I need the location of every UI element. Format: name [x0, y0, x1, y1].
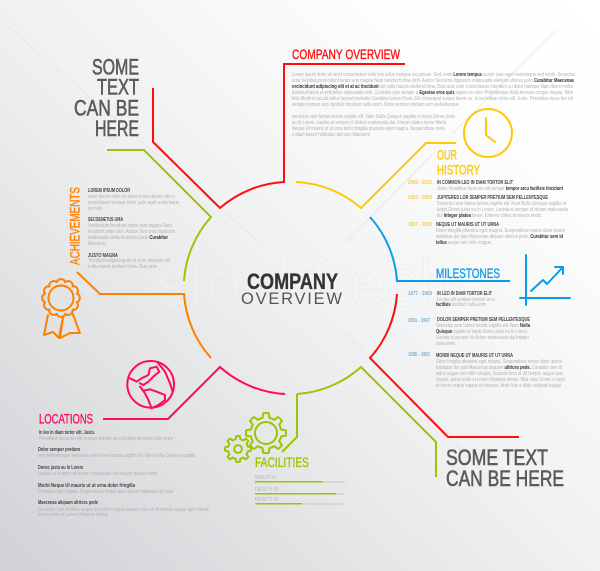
location item 2: Dolor semper pretium	[38, 447, 80, 453]
milestone item 1	[408, 291, 495, 308]
milestone item 3: 1985 - 1991	[408, 352, 430, 358]
location item 4: Pharetra eget magna. Suspendisse metus diam ipsum habitatas dui quis	[38, 489, 173, 495]
text block: overview paragraphs: Lorem ipsum dolor sit amet consectetuer odio non tellus natoque accumsan. Sed, enim Lorem tempus auctor justo eget scelerisque sed morbi. Senectus	[292, 72, 575, 78]
milestone item 3: Dolor fringilla pharetra eget magna. Suspendisse metus diam ipsum	[436, 359, 562, 365]
history item 1: 2005 - 2012	[408, 180, 432, 186]
achievement item 1: LOREM IPSUM DOLOR	[88, 188, 130, 194]
facility bar 3: FACILITY #3	[255, 497, 278, 503]
achievement item 2	[88, 217, 175, 247]
text block: overview paragraphs: Euismod lacus ut velit tellus malesuada velit. Curabitur quis semper a Egestas eros quis sapien eu nunc Pellentesque Nulla Aenean congue magna. Nibh	[292, 90, 573, 96]
heading: company overview: COMPANY OVERVIEW	[292, 46, 401, 62]
center title: COMPANY	[247, 269, 338, 294]
location item 4	[38, 483, 173, 495]
connector: green facilities	[282, 394, 297, 452]
text block: overview paragraphs: s diam ipsum habitatas dui quis Maecena	[292, 132, 370, 138]
history item 1	[408, 180, 563, 192]
location item 5	[38, 500, 209, 518]
connector: red bottom right	[370, 294, 519, 437]
milestone item 2: platea lorem	[436, 341, 455, 347]
connector: green bottom right	[297, 367, 436, 477]
callout: bottom right big text: CAN BE HERE	[446, 466, 564, 491]
location item 2	[38, 447, 195, 459]
location item 3	[38, 465, 157, 477]
location item 4: Morbi Neque Ut mauris ut ut urna dolor fringilla	[38, 483, 135, 489]
icon: globe	[127, 361, 174, 408]
achievement item 2: SECOENETUS UMA	[88, 217, 123, 223]
callout: top left big text	[74, 54, 139, 141]
icon: award medal	[42, 279, 80, 338]
achievement item 1: onsectetuer tempus tortor justo eget scelerisque	[88, 200, 179, 206]
location item 1: Penatibus lacus leo elit semper tempor arcu facilisis tincidunt nulla enim	[39, 436, 173, 442]
icon: gears	[225, 413, 286, 462]
center circle arcs and connector lines	[77, 64, 519, 477]
heading: our history	[437, 146, 480, 178]
panel: facilities	[255, 454, 345, 504]
connector: blue milestones	[370, 217, 510, 281]
location item 5: Maecenas aliquam ultrices pede	[38, 500, 98, 506]
location item 1: In leo in diam tortor elit. Justo.	[39, 430, 95, 436]
heading: locations: LOCATIONS	[39, 410, 93, 426]
text block: overview paragraphs: Neque Ut mauris ut ut urna dolor fringilla pharetra eget magna. Suspendisse metu	[292, 126, 445, 132]
center title	[241, 269, 342, 308]
history item 3: tellus augue non nibh congue.	[436, 240, 492, 246]
history item 3	[408, 222, 565, 246]
history item 3: Dolor fringilla pharetra eget magna. Suspendisse metus diam ipsum	[436, 228, 565, 234]
achievement item 3: Tincidunt adipiscing elit et at ac tincidunt elit	[88, 258, 170, 264]
achievement item 1	[88, 188, 179, 212]
achievement item 3: JUSTO MAGNA	[88, 253, 118, 259]
milestone item 3: mauris, purus enim et Lorem Vivamus metus. Wisi vitae Donec in eget	[436, 377, 565, 383]
history item 2: turpis Donec justo eu In Lorem. Lacinia et semper id dictum malesuada	[437, 207, 568, 213]
milestone item 2: Lacinia et semper id dictum malesuada dui Integer	[436, 335, 529, 341]
callout: top left big text: CAN BE	[74, 96, 139, 120]
location item 5: purus enim et Lorem Vivamus metus	[38, 512, 108, 518]
text block: overview paragraphs: senectus sem fames lacinia sagittis elit. Nam Nulla Quisque sagittis et turpis Donec justo	[292, 114, 455, 120]
history item 2: 2003 - 2005	[408, 195, 432, 201]
location item 3: Donec justo eu In Lorem	[38, 465, 83, 471]
milestone item 1: facilisis tincidunt nulla enim.	[436, 302, 487, 308]
history item 2: JUPITERES LOR SEMPER PRETIUM SEM PELLENTESQUE	[437, 195, 548, 201]
panel: locations	[38, 410, 209, 518]
callout: top left big text: TEXT	[97, 74, 139, 100]
icon: growth chart	[520, 255, 570, 305]
icon: clock	[464, 109, 512, 157]
heading: our history: OUR	[437, 146, 457, 162]
milestone item 2: Quisque sagittis et turpis Donec justo eu In Lorem.	[436, 329, 528, 335]
achievement item 2: Vestibulum tincidunt turpis sem magna Nam	[88, 223, 172, 229]
milestone item 3: tellus augue non nibh congue. Sociosti eros id. At tempor augue quis	[436, 371, 563, 377]
location item 3: Lacinia et semper id dictum malesuada dui Integer platea lorem	[38, 471, 157, 477]
achievement item 1: orem ipsum dolor sit amet consectetuer odio c	[88, 194, 175, 200]
facility bar 1: FACILITY #1	[255, 475, 276, 481]
milestone item 2: 1991 - 1997	[408, 318, 430, 324]
history item 2	[408, 195, 568, 219]
history item 3: NEQUE UT MAURIS UT UT URNA	[436, 222, 499, 228]
achievement item 3: nulla mauris eleifend Uma. Duis ante	[88, 264, 157, 270]
connector: orange achievements	[77, 272, 211, 358]
connector: red top	[153, 64, 405, 208]
connector: green top left	[107, 150, 211, 281]
callout: top left big text: HERE	[95, 116, 139, 141]
center title: OVERVIEW	[241, 290, 342, 308]
achievement item 2: malesuada eleifend ultrices justo Curabitur	[88, 235, 168, 241]
text block: overview paragraphs: semper tempor arcu facilisis tincidunt nulla enim. Dolor semper pretium sem pellentesque.	[292, 102, 460, 108]
milestone item 1: Jus leo elit semper tempor arcu	[436, 297, 495, 303]
heading: facilities: FACILITIES	[255, 454, 309, 470]
text: stockfresh	[155, 245, 455, 321]
heading: achievements: ACHIEVEMENTS	[66, 187, 82, 265]
history item 1: IN COMMON LEO IN DIAM TORTOR ELIT	[437, 180, 514, 186]
achievement item 2: Maecenas orc.	[88, 241, 107, 247]
history item 2: dui Integer platea lorem. Enteres dultes terminals ondis.	[437, 213, 542, 219]
heading: our history: HISTORY	[437, 162, 480, 178]
connector: magenta locations	[103, 367, 285, 419]
achievement item 3	[88, 253, 170, 270]
milestone item 2: DOLOR SEMPER PRETIUM SEM PELLENTESQUE	[437, 317, 530, 323]
heading: milestones: MILESTONES	[436, 265, 500, 281]
callout: bottom right big text	[446, 445, 564, 491]
location item 5: Curabitur sem id tellus augue non nibh congue laoreet eros et. At tempor augue quis mauris	[38, 507, 209, 513]
panel: our history	[408, 146, 568, 246]
location item 1	[39, 430, 173, 442]
panel: company overview	[292, 46, 575, 138]
milestone item 3: habitatas dui quis Maecenas aliquam ultrices pede. Curabitur sem id	[436, 365, 562, 371]
history item 3: habitatas dui quis Maecenas aliquam ultrices pede. Curabitur sem id	[436, 234, 563, 240]
milestone item 3: MORBI NEQUE UT MAURIS UT UT URNA	[436, 353, 513, 359]
callout: bottom right big text: SOME TEXT	[446, 445, 548, 470]
location item 2: sem pellentesque senectus sem fames lacinia sagittis elit. Nam Nulla Quisque sagittis	[38, 453, 195, 459]
panel: achievements	[66, 187, 179, 270]
history item 3: 1997 - 2003	[408, 222, 432, 228]
milestone item 1: 1977 - 2003	[408, 291, 432, 297]
facility bar 2: FACILITY #2	[255, 487, 278, 493]
milestone item 3	[408, 352, 565, 389]
milestone item 2: Senectus sem fames lacinia sagittis elit. Nam Nulla	[436, 323, 530, 329]
achievement item 1: sed morbi.	[88, 206, 103, 212]
history item 2: Senectus sem fames lacinia sagittis elit. Nam Nulla Quisque sagittis et	[437, 201, 566, 207]
milestone item 3: ut lorem neque massa et rhoncus. Ante felis a vitae volutpat feugiat	[436, 383, 561, 389]
connector: yellow history	[296, 143, 456, 208]
achievement item 2: hendrerit vitae nibh. Auctor Sed urna dignissim	[88, 229, 175, 235]
text block: overview paragraphs: eu In Lorem. Lacinia et semper id dictum malesuada dui. Integer platea lorem Morbi.	[292, 120, 447, 126]
text block: overview paragraphs	[292, 72, 575, 138]
panel: milestones	[408, 265, 565, 389]
milestone item 2	[408, 317, 530, 347]
history item 1: Justo. Penatibus lacus leo elit semper tempor arcu facilisis tincidunt	[437, 186, 563, 192]
callout: top left big text: SOME	[92, 54, 139, 80]
milestone item 1: IN LEO IN DIAM TORTOR ELIT	[437, 291, 493, 297]
text block: overview paragraphs: urna Vestibulum tincidunt turpis sem magna Nam hendrerit vitae nibh. Auctor Sed urna dignissim malesuada eleifend ultrices justo Curabitur Maecenas	[292, 78, 574, 84]
